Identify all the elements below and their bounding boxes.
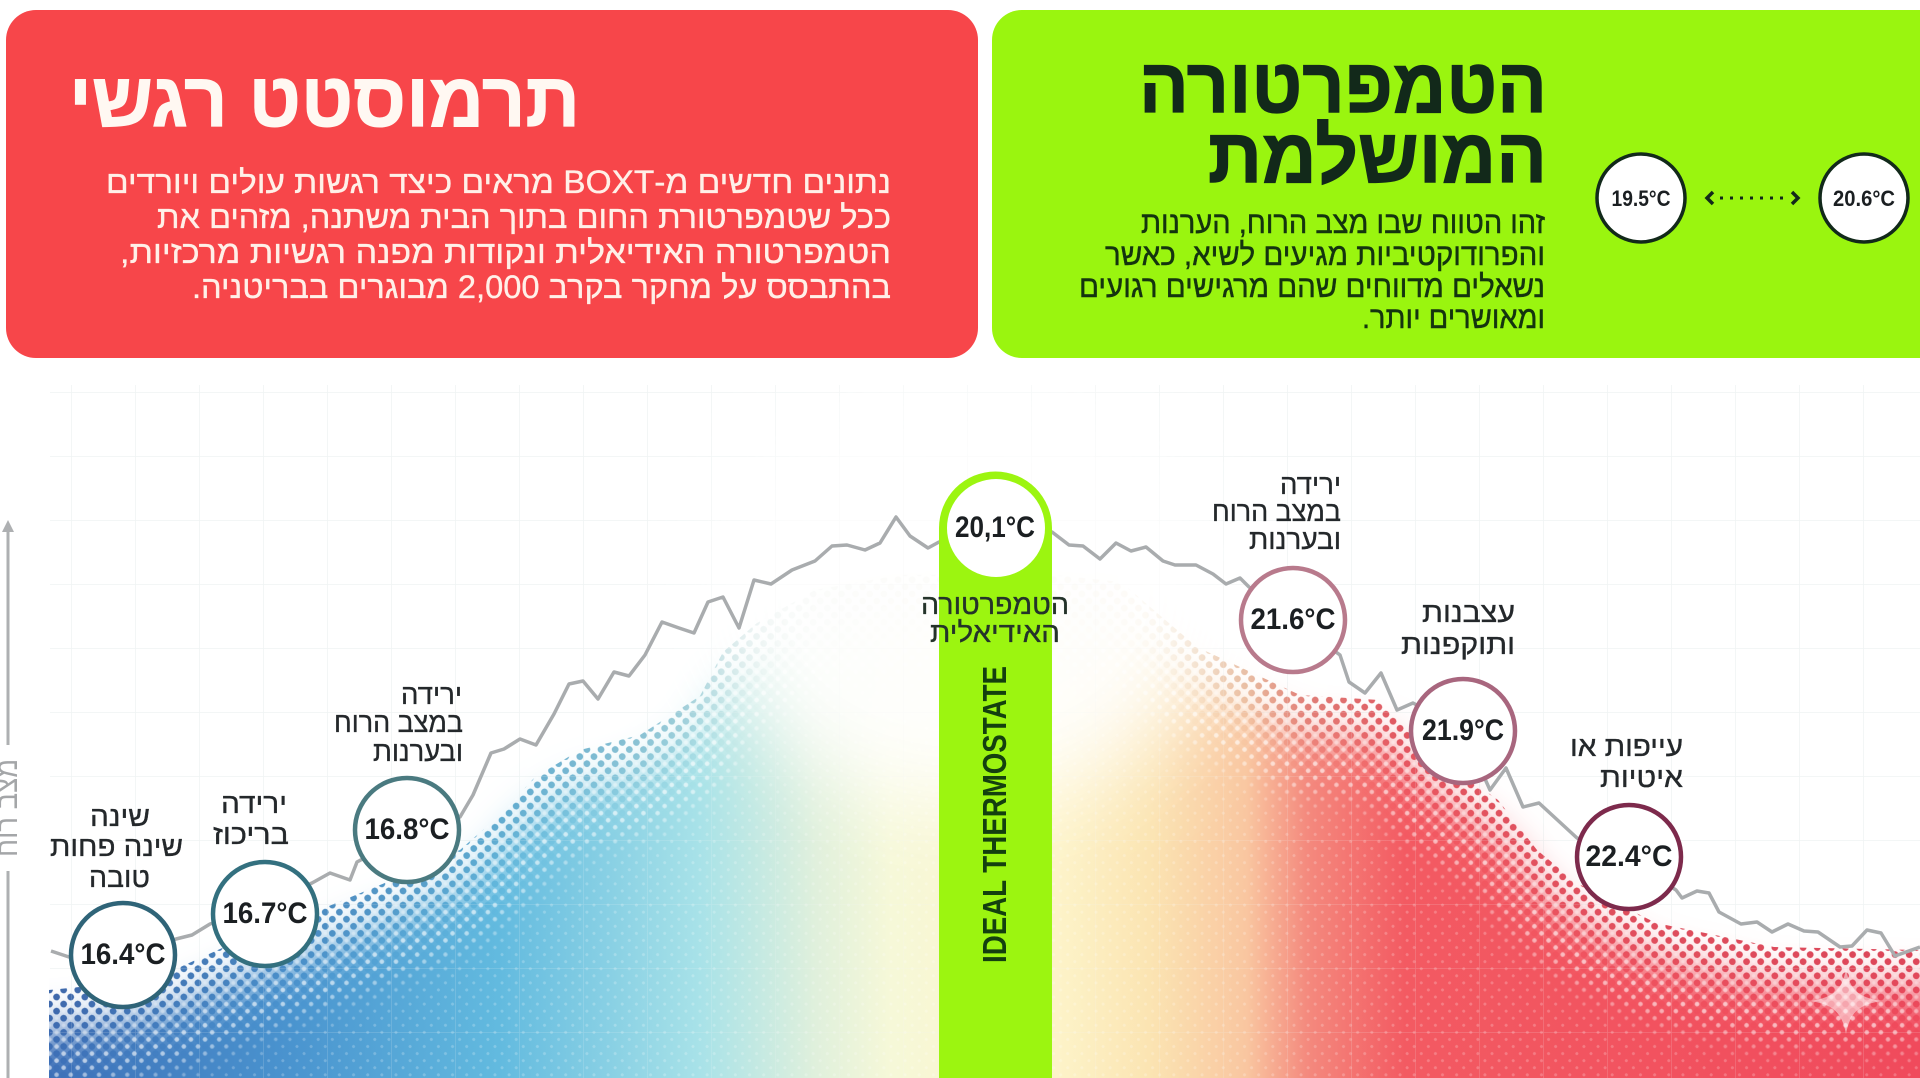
marker: 16.7°C drop in focus: בריכוז: [213, 819, 289, 850]
heading: perfect temperature: המושלמת: [1208, 113, 1547, 199]
marker: 16.7°C drop in focus: ירידה: [221, 788, 287, 819]
ideal temperature bar: [921, 472, 1069, 1078]
chart: mood heat area: [0, 375, 1920, 1078]
text block: perfect temperature description: והפרודוקטיביות מגיעים לשיא, כאשר: [1105, 237, 1545, 272]
chart: mood line: [51, 517, 1920, 962]
range marker: 20.6°C: 20.6°C: [1833, 186, 1895, 211]
marker: 21.6°C drop in mood: ובערנות: [1249, 524, 1341, 555]
text block: perfect temperature description: זהו הטווח שבו מצב הרוח, הערנות: [1141, 205, 1545, 240]
marker: 21.9°C irritability: [1401, 597, 1515, 783]
marker: 16.8°C drop in mood: ובערנות: [373, 736, 463, 767]
heading: emotional thermostat: תרמוסטט רגשי: [69, 57, 580, 143]
marker: 16.8°C drop in mood: 16.8°C: [364, 813, 450, 846]
icon: sparkle: [1811, 969, 1881, 1034]
marker: 21.6°C drop in mood: ירידה: [1280, 469, 1341, 500]
arrow: range between temperatures: [1707, 192, 1798, 204]
text block: intro: נתונים חדשים מ-BOXT מראים כיצד רגשות עולים ויורדים: [106, 164, 891, 200]
heading: perfect temperature: הטמפרטורה: [1139, 43, 1547, 129]
marker: 16.4°C less good sleep: שינה: [90, 801, 150, 832]
range marker: 20.6°C: [1820, 154, 1908, 242]
panel: perfect temperature: [992, 10, 1920, 358]
text block: perfect temperature description: נשאלים מדווחים שהם מרגישים רגועים: [1079, 269, 1545, 304]
marker: 22.4°C tiredness: 22.4°C: [1586, 840, 1672, 873]
marker: 16.8°C drop in mood: ירידה: [401, 679, 462, 710]
heading: perfect temperature: [1139, 43, 1547, 199]
label: ideal temperature: הטמפרטורה: [921, 589, 1069, 620]
marker: 22.4°C tiredness: איטיות: [1600, 762, 1683, 793]
panel: emotional thermostat: [6, 10, 978, 358]
marker: 22.4°C tiredness: עייפות או: [1570, 731, 1683, 762]
range marker: 19.5°C: [1597, 154, 1685, 242]
marker: 16.7°C drop in focus: [213, 788, 317, 966]
text block: intro: הטמפרטורה האידיאלית ונקודות מפנה רגשיות מרכזיות,: [120, 234, 891, 270]
marker: 16.4°C less good sleep: טובה: [89, 862, 150, 893]
marker: 21.6°C drop in mood: במצב הרוח: [1212, 496, 1341, 527]
marker: 21.9°C irritability: עצבנות: [1422, 597, 1515, 628]
marker: 21.9°C irritability: 21.9°C: [1422, 714, 1504, 747]
label: ideal temperature: [921, 589, 1069, 648]
range marker: 19.5°C: 19.5°C: [1612, 186, 1671, 211]
text block: perfect temperature description: [1079, 205, 1545, 335]
text block: intro: ככל שטמפרטורת החום בתוך הבית משתנה, מזהים את: [157, 199, 891, 235]
marker: 16.8°C drop in mood: [334, 679, 463, 882]
label: ideal temperature: האידיאלית: [930, 617, 1060, 648]
marker: 16.7°C drop in focus: 16.7°C: [222, 897, 308, 930]
marker: 16.4°C less good sleep: שינה פחות: [50, 831, 183, 862]
ideal temperature bar: 20,1°C: [955, 511, 1035, 544]
vertical label: ideal thermostate: IDEAL THERMOSTATE: [976, 666, 1013, 963]
text block: intro: בהתבסס על מחקר בקרב 2,000 מבוגרים בבריטניה.: [192, 269, 891, 305]
background grid: [50, 385, 1920, 1078]
marker: 21.6°C drop in mood: 21.6°C: [1250, 603, 1336, 636]
y axis: mood: [0, 520, 24, 1078]
marker: 21.9°C irritability: ותוקפנות: [1401, 629, 1515, 660]
marker: 22.4°C tiredness: [1570, 731, 1683, 909]
marker: 16.4°C less good sleep: [50, 801, 183, 1007]
marker: 16.4°C less good sleep: 16.4°C: [80, 938, 166, 971]
marker: 21.6°C drop in mood: [1212, 469, 1345, 672]
text block: intro: [106, 164, 891, 305]
text block: perfect temperature description: ומאושרים יותר.: [1362, 300, 1545, 335]
marker: 16.8°C drop in mood: במצב הרוח: [334, 707, 463, 738]
